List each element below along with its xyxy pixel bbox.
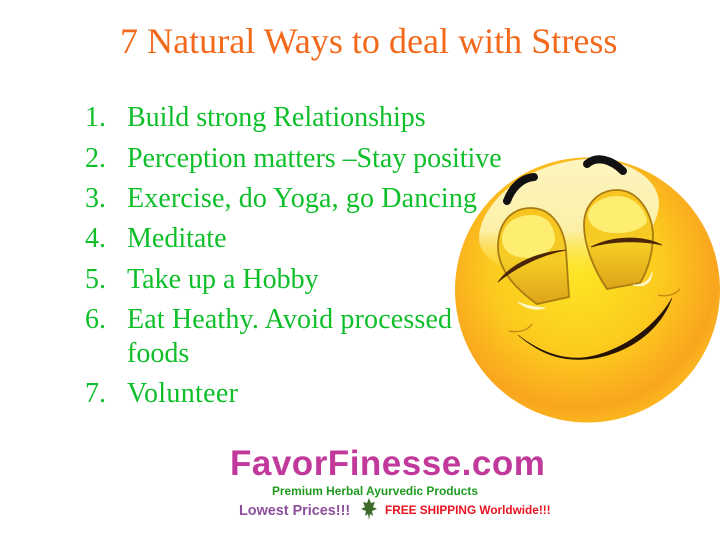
- numbered list: Eat Heathy. Avoid processed: [127, 304, 452, 335]
- item 4: [85, 223, 227, 254]
- item 1: [85, 102, 426, 133]
- item 4: 4.: [85, 223, 106, 254]
- item 5: [85, 264, 319, 295]
- left eyebrow: [507, 177, 534, 201]
- right eye: [584, 190, 662, 289]
- numbered list: Volunteer: [127, 378, 238, 409]
- free shipping: FREE SHIPPING Worldwide!!!: [385, 503, 551, 517]
- numbered list: foods: [127, 338, 189, 369]
- item 1: 1.: [85, 102, 106, 133]
- item 3: [85, 183, 477, 214]
- item 7: 7.: [85, 378, 106, 409]
- tagline: Premium Herbal Ayurvedic Products: [272, 484, 478, 498]
- numbered list: Perception matters –Stay positive: [127, 143, 502, 174]
- item 2: 2.: [85, 143, 106, 174]
- right dimple: [658, 289, 680, 296]
- numbered list: [85, 102, 502, 409]
- face: [455, 158, 720, 422]
- right eyebrow: [587, 159, 623, 171]
- numbered list: Build strong Relationships: [127, 102, 426, 133]
- numbered list: Meditate: [127, 223, 227, 254]
- item 6: 6.: [85, 304, 106, 335]
- brand logo: [230, 444, 551, 520]
- numbered list: Exercise, do Yoga, go Dancing: [127, 183, 477, 214]
- forehead highlight: [479, 159, 659, 278]
- icon: herb leaf: [361, 498, 377, 520]
- brand name: FavorFinesse.com: [230, 444, 545, 483]
- item 5: 5.: [85, 264, 106, 295]
- lowest prices: Lowest Prices!!!: [239, 503, 350, 519]
- smile: [518, 298, 672, 360]
- item 3: 3.: [85, 183, 106, 214]
- item 7: [85, 378, 238, 409]
- left dimple: [509, 324, 532, 332]
- left eye: [498, 208, 569, 309]
- item 6: [85, 304, 452, 369]
- title: 7 Natural Ways to deal with Stress: [120, 21, 617, 61]
- numbered list: Take up a Hobby: [127, 264, 319, 295]
- item 2: [85, 143, 502, 174]
